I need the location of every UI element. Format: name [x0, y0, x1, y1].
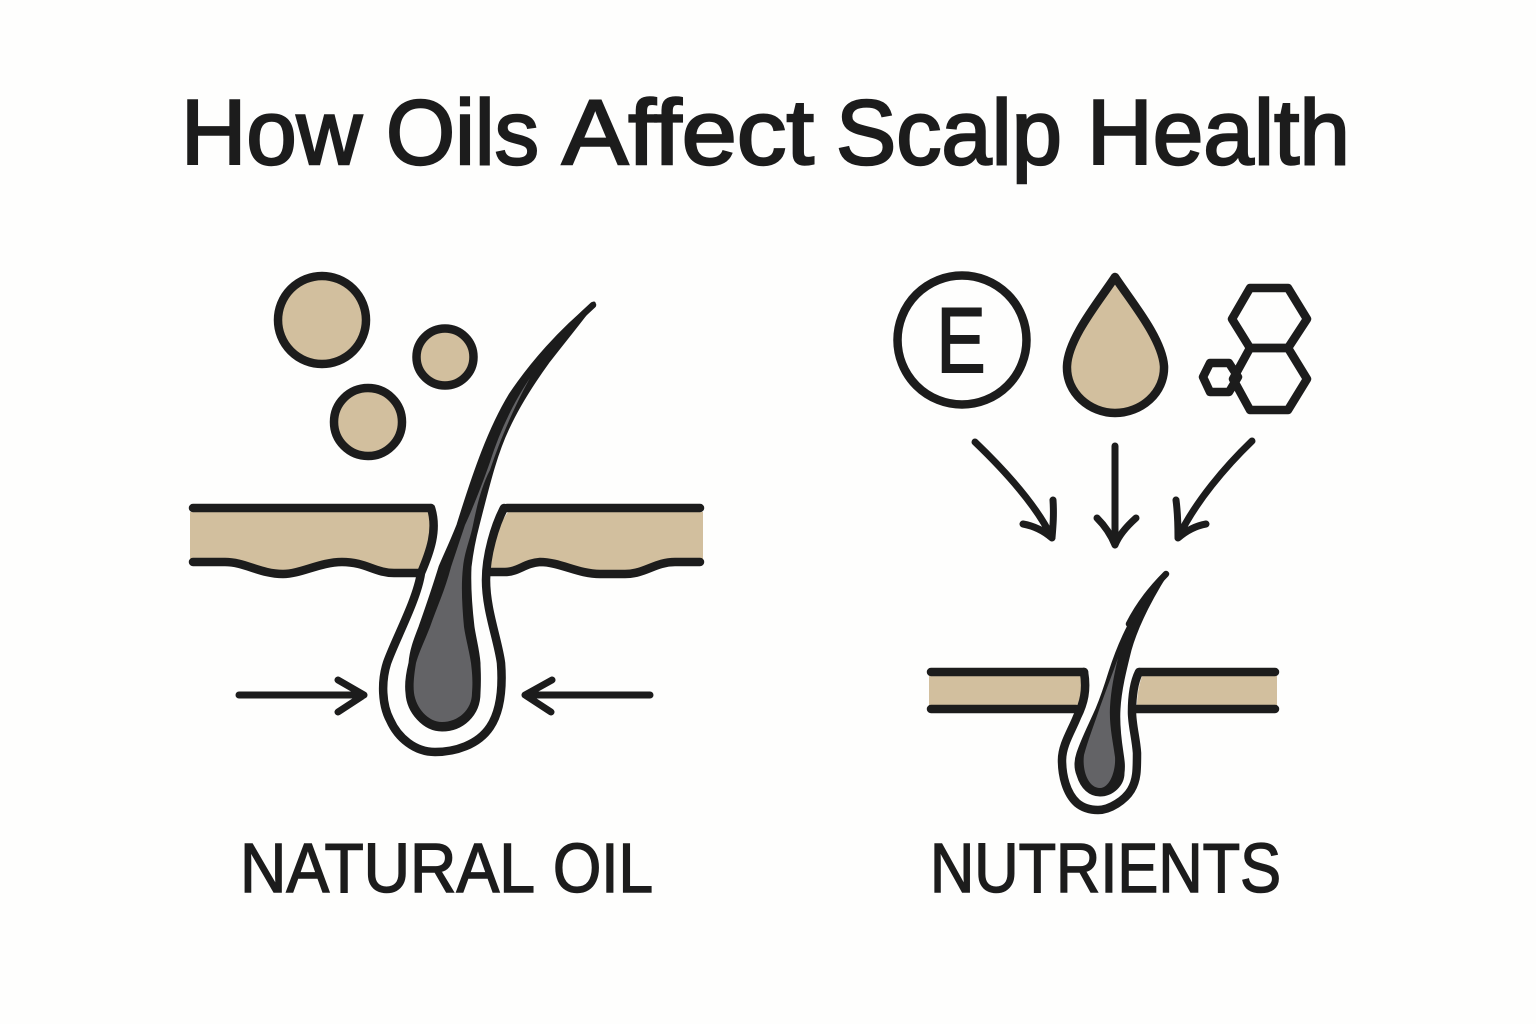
title: How [181, 82, 363, 184]
icon: large oil droplet [278, 276, 366, 364]
panel: nutrients [898, 276, 1307, 810]
label: nutrients: NUTRIENTS [930, 829, 1281, 907]
title: Health [1087, 82, 1350, 184]
panel: natural oil [190, 276, 703, 752]
icon: molecule [1203, 288, 1307, 410]
skin layer right [488, 508, 703, 574]
arrow: from oil drop [1097, 446, 1136, 545]
title: Oils [386, 82, 539, 184]
arrow: from vitamin E [975, 442, 1053, 538]
icon: vitamin E [898, 276, 1026, 404]
arrow: pointing right to follicle [239, 680, 364, 712]
arrow: pointing left to follicle [525, 680, 650, 712]
skin layer left [190, 508, 430, 574]
arrow: from molecule [1176, 441, 1252, 538]
hair strand and root [1076, 573, 1167, 795]
hair follicle sheath [1062, 672, 1139, 810]
title: Affect [562, 82, 814, 184]
icon: medium oil droplet [334, 388, 402, 456]
label: natural oil: NATURAL [240, 829, 535, 907]
title [181, 82, 1350, 184]
label: natural oil: OIL [553, 829, 653, 907]
icon: vitamin E: E [936, 289, 986, 392]
skin layer [929, 672, 1277, 709]
hair follicle sheath [383, 508, 504, 752]
title: Scalp [836, 82, 1062, 184]
icon: small oil droplet [416, 328, 474, 386]
icon: oil drop [1067, 277, 1164, 413]
hair strand and root [407, 303, 594, 730]
